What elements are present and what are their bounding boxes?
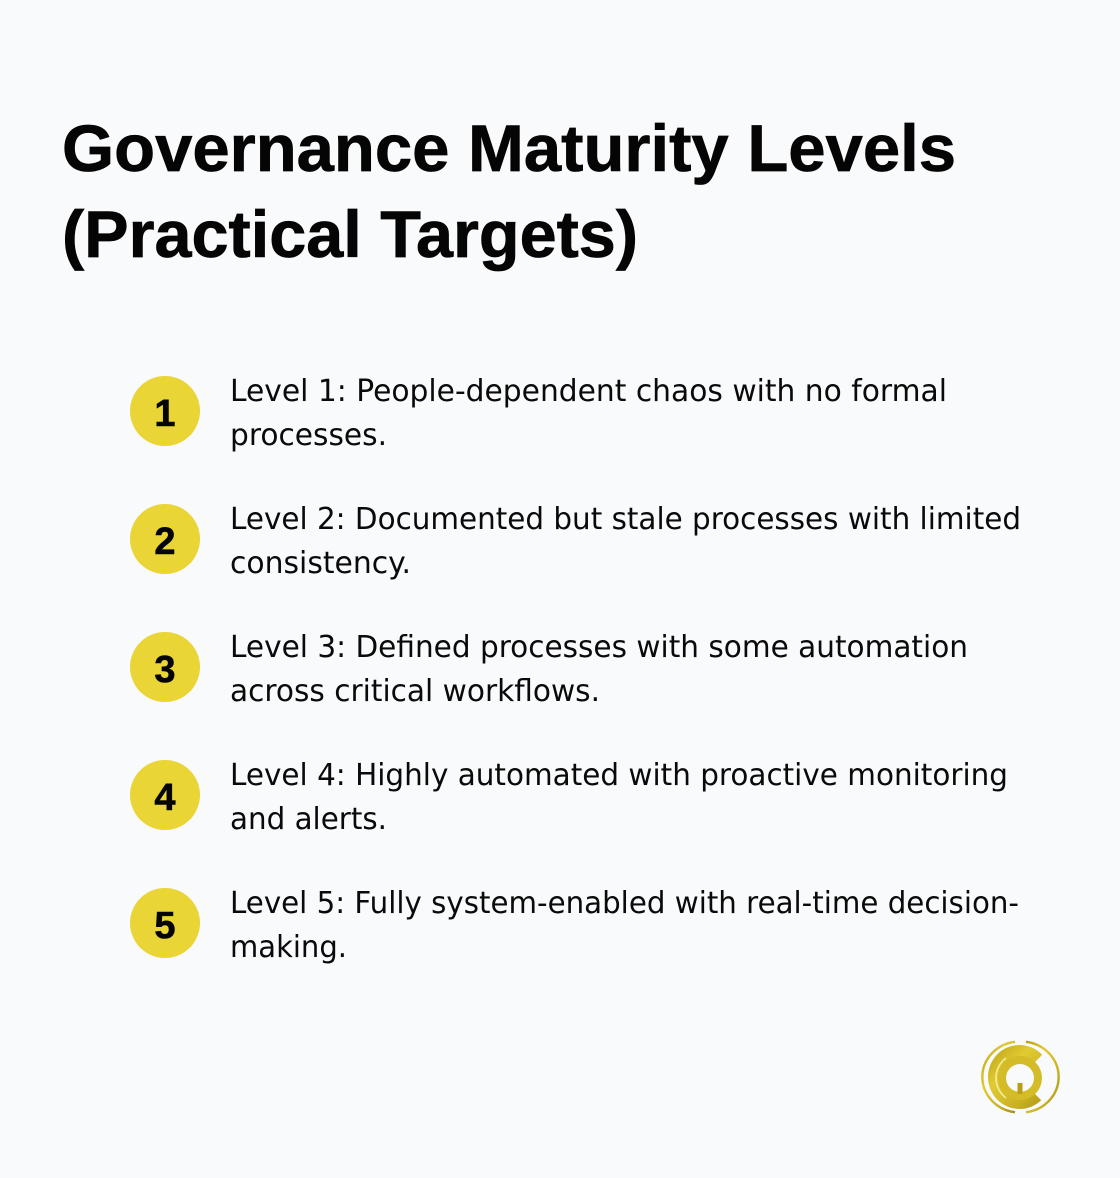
level 2 text: consistency.	[230, 546, 411, 581]
badge 1	[130, 376, 200, 446]
level 2	[130, 502, 1021, 581]
badge 5: 5	[154, 905, 176, 947]
title: (Practical Targets)	[62, 197, 638, 271]
title	[62, 111, 956, 271]
badge 4: 4	[154, 777, 176, 819]
list of maturity levels	[130, 374, 1021, 965]
level 2 text	[230, 502, 1021, 581]
level 3	[130, 630, 968, 709]
badge 2	[130, 504, 200, 574]
icon: gold logo	[982, 1042, 1059, 1112]
level 1 text: processes.	[230, 418, 387, 453]
badge 5	[130, 888, 200, 958]
badge 3: 3	[154, 649, 176, 691]
level 4 text	[230, 758, 1008, 837]
badge 1: 1	[154, 393, 176, 435]
level 3 text: Level 3: Defined processes with some automation	[230, 630, 968, 665]
level 5	[130, 886, 1019, 965]
level 4 text: Level 4: Highly automated with proactive monitoring	[230, 758, 1008, 793]
level 3 text: across critical workflows.	[230, 674, 600, 709]
level 4	[130, 758, 1008, 837]
level 1 text: Level 1: People-dependent chaos with no formal	[230, 374, 947, 409]
level 1 text	[230, 374, 947, 453]
level 3 text	[230, 630, 968, 709]
title: Governance Maturity Levels	[62, 111, 956, 185]
badge 3	[130, 632, 200, 702]
level 4 text: and alerts.	[230, 802, 387, 837]
badge 2: 2	[154, 521, 176, 563]
level 5 text: Level 5: Fully system-enabled with real-time decision-	[230, 886, 1019, 921]
level 1	[130, 374, 947, 453]
level 2 text: Level 2: Documented but stale processes with limited	[230, 502, 1021, 537]
level 5 text: making.	[230, 930, 347, 965]
level 5 text	[230, 886, 1019, 965]
badge 4	[130, 760, 200, 830]
